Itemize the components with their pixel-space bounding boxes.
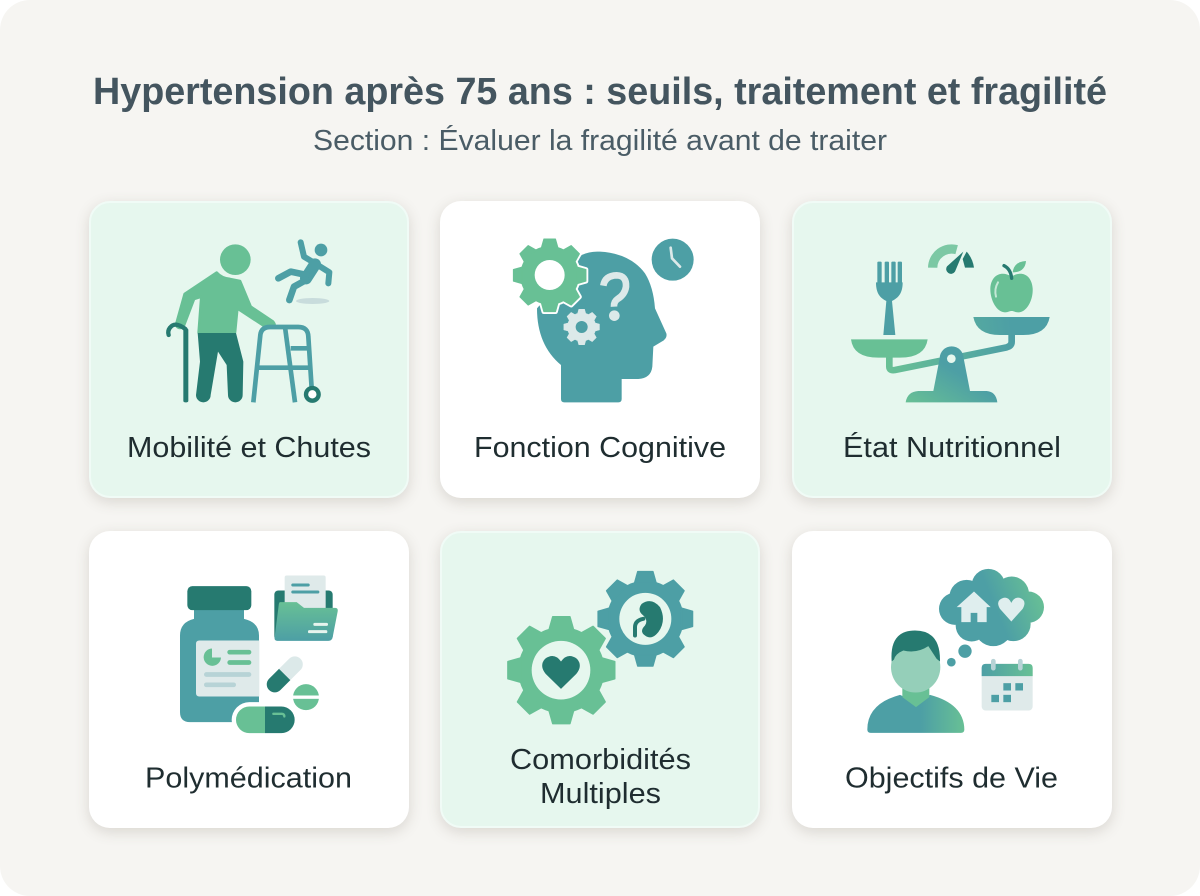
subtitle: Section : Évaluer la fragilité avant de traiter — [313, 124, 887, 157]
panel: Comorbidités Multiples — [440, 530, 760, 828]
panel: Comorbidités Multiples: Multiples — [540, 778, 661, 810]
icon: person thinking of home, heart and calendar — [867, 568, 1044, 732]
icon: elderly person with cane and walker, falling figure — [168, 242, 329, 402]
label: Fonction Cognitive — [474, 432, 726, 464]
panel: État Nutritionnel — [792, 201, 1112, 498]
panel: Objectifs de Vie — [792, 530, 1112, 828]
label: Comorbidités — [510, 744, 691, 776]
label: Polymédication — [145, 762, 352, 794]
label: État Nutritionnel — [843, 432, 1061, 464]
title: Hypertension après 75 ans : seuils, traitement et fragilité — [93, 71, 1107, 113]
title and subtitle — [93, 71, 1107, 157]
panel: Polymédication — [89, 530, 408, 828]
icon: head with gears, question mark and clock — [513, 239, 694, 402]
label: Objectifs de Vie — [845, 762, 1058, 794]
panel: Mobilité et Chutes — [89, 201, 408, 498]
icon: balance with fork, apple and gauge — [851, 249, 1050, 402]
icon: pill bottle, capsules and folder — [180, 575, 338, 737]
icon: two gears with heart and kidney — [508, 571, 693, 723]
label: Mobilité et Chutes — [127, 432, 371, 464]
panel: Fonction Cognitive — [440, 201, 760, 498]
